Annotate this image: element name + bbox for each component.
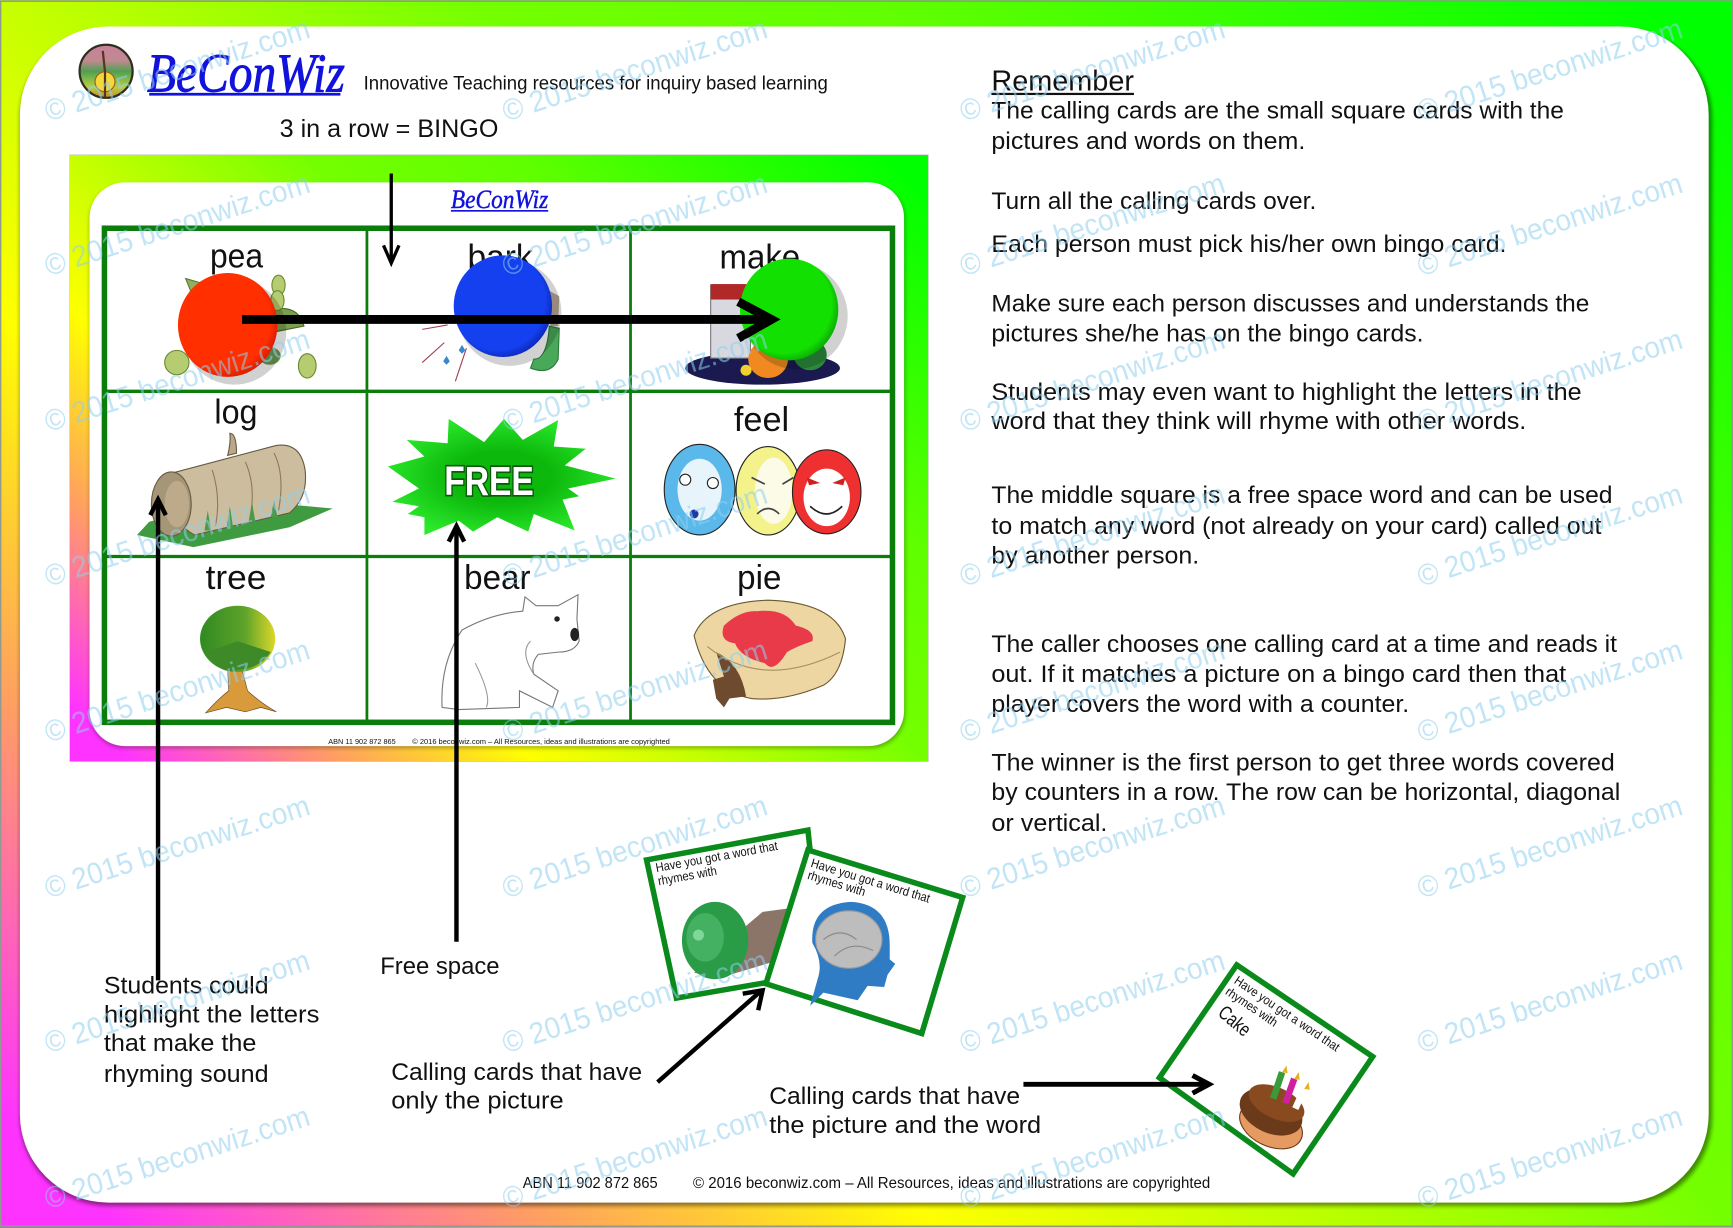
watermarks: © 2015 beconwiz.com	[41, 323, 314, 439]
watermarks: © 2015 beconwiz.com	[41, 12, 314, 128]
watermarks: © 2015 beconwiz.com	[41, 1100, 314, 1216]
heading: Remember: Remember	[991, 66, 1134, 98]
paragraph: winner: by counters in a row. The row can be horizontal, diagonal	[991, 779, 1620, 806]
paragraph: winner: The winner is the first person to get three words covered	[991, 749, 1615, 776]
tagline: Innovative Teaching resources for inquiry based learning	[364, 73, 828, 95]
arrow: to log letters	[150, 500, 166, 980]
calling card: brain	[766, 850, 963, 1033]
counter: blue	[454, 255, 561, 366]
paragraph: caller: The caller chooses one calling card at a time and reads it	[991, 631, 1617, 658]
watermarks: © 2015 beconwiz.com	[498, 1100, 771, 1216]
paragraph: free square: The middle square is a free space word and can be used	[991, 482, 1613, 509]
watermarks: © 2015 beconwiz.com	[498, 323, 771, 439]
watermarks: © 2015 beconwiz.com	[498, 789, 771, 905]
watermarks: © 2015 beconwiz.com	[1413, 1100, 1687, 1216]
paragraph: pick card: Each person must pick his/her own bingo card.	[991, 231, 1506, 258]
callout: highlight letters: rhyming sound	[104, 1061, 269, 1088]
watermarks: © 2015 beconwiz.com	[956, 944, 1229, 1060]
watermarks: © 2015 beconwiz.com	[41, 167, 314, 283]
watermarks: © 2015 beconwiz.com	[956, 1100, 1229, 1216]
footer: ABN 11 902 872 865	[523, 1175, 658, 1192]
watermarks: © 2015 beconwiz.com	[41, 634, 314, 749]
cell: bark	[422, 239, 559, 381]
watermarks: © 2015 beconwiz.com	[41, 944, 314, 1060]
watermarks: © 2015 beconwiz.com	[1413, 634, 1687, 749]
cell: FREE starburst: FREE	[444, 458, 534, 504]
calling card: cake: Cake	[1214, 1002, 1255, 1041]
calling card: snail: Have you got a word that	[654, 838, 779, 875]
paragraph: caller	[991, 631, 1617, 718]
watermarks: © 2015 beconwiz.com	[1413, 478, 1687, 594]
footer: © 2016 beconwiz.com – All Resources, ideas and illustrations are copyrighted	[693, 1175, 1210, 1192]
cell: log: log	[214, 393, 258, 431]
watermarks: © 2015 beconwiz.com	[498, 12, 771, 128]
icon: logo medallion	[80, 45, 133, 98]
paragraph: discuss: Make sure each person discusses and understands the	[991, 291, 1589, 318]
paragraph: free square: by another person.	[991, 543, 1199, 570]
paragraph: discuss: pictures she/he has on the bingo cards.	[991, 321, 1424, 348]
paragraph: winner	[991, 749, 1620, 837]
callout: highlight letters: Students could	[104, 973, 269, 1000]
calling card: cake: rhymes with	[1223, 984, 1281, 1030]
watermarks: © 2015 beconwiz.com	[956, 789, 1229, 905]
watermarks: © 2015 beconwiz.com	[956, 323, 1229, 439]
brand name: BeConWiz	[147, 43, 345, 104]
arrow: to cake card	[1023, 1075, 1209, 1093]
paragraph: highlight: word that they think will rhyme with other words.	[990, 408, 1526, 435]
watermarks: © 2015 beconwiz.com	[956, 12, 1229, 128]
heading: 3 in a row: 3 in a row = BINGO	[280, 115, 498, 143]
cell: make	[685, 239, 840, 385]
watermarks: © 2015 beconwiz.com	[1413, 944, 1687, 1060]
watermarks: © 2015 beconwiz.com	[1413, 323, 1687, 439]
cell: make: make	[720, 239, 800, 277]
paragraph: highlight: Students may even want to highlight the letters in the	[991, 379, 1582, 406]
cell: log	[137, 393, 333, 547]
callout: picture only cards	[391, 1059, 642, 1115]
calling card: snail	[647, 830, 823, 998]
watermarks: © 2015 beconwiz.com	[498, 634, 771, 749]
paragraph: caller: player covers the word with a counter.	[991, 691, 1409, 718]
cell: pea: pea	[210, 237, 264, 275]
watermarks: © 2015 beconwiz.com	[41, 478, 314, 594]
watermarks: © 2015 beconwiz.com	[498, 167, 771, 283]
paragraph: turn over: Turn all the calling cards over.	[991, 188, 1316, 215]
calling card: cake	[1159, 965, 1373, 1174]
callout: picture and word cards: the picture and the word	[769, 1112, 1041, 1139]
callout: picture and word cards: Calling cards that have	[769, 1083, 1020, 1110]
callout: highlight letters: that make the	[104, 1030, 256, 1057]
callout: highlight letters	[104, 973, 319, 1088]
watermarks: © 2015 beconwiz.com	[1413, 167, 1687, 283]
cell: bark: bark	[468, 239, 534, 277]
watermarks: © 2015 beconwiz.com	[956, 634, 1229, 749]
cell: feel: feel	[734, 401, 789, 439]
paragraph: highlight	[990, 379, 1582, 435]
arrow: row across	[242, 302, 771, 338]
watermarks: © 2015 beconwiz.com	[41, 789, 314, 905]
paragraph: caller: out. If it matches a picture on a bingo card then that	[991, 661, 1566, 688]
cell: feel	[664, 401, 861, 535]
calling card: brain: Have you got a word that	[809, 855, 932, 906]
arrow: column down	[384, 174, 399, 263]
arrow: to free space	[449, 526, 464, 942]
watermarks: © 2015 beconwiz.com	[1413, 789, 1687, 905]
cell: pie	[694, 559, 846, 707]
cell: bear: bear	[464, 559, 531, 597]
callout: picture only cards: only the picture	[391, 1088, 564, 1115]
cell: pie: pie	[737, 559, 781, 597]
paragraph: winner: or vertical.	[991, 810, 1107, 837]
calling card: snail: rhymes with	[657, 863, 718, 888]
small brand name: BeConWiz	[451, 184, 548, 214]
calling card: cake: Have you got a word that	[1232, 973, 1343, 1055]
paragraph: free square: to match any word (not already on your card) called out	[991, 513, 1602, 540]
callout: highlight letters: highlight the letters	[104, 1001, 319, 1028]
callout: picture only cards: Calling cards that have	[391, 1059, 642, 1086]
footer of bingo card: © 2016 beconwiz.com – All Resources, ideas and illustrations are copyrighted	[412, 738, 670, 746]
arrow: to picture cards	[658, 990, 763, 1082]
paragraph: calling cards: pictures and words on them.	[991, 128, 1305, 155]
panel: example bingo card	[70, 155, 928, 762]
paragraph: free square	[991, 482, 1613, 570]
counter: red	[178, 273, 286, 385]
bingo grid	[104, 228, 893, 723]
paragraph: discuss	[991, 291, 1589, 348]
watermarks: © 2015 beconwiz.com	[1413, 12, 1687, 128]
instructions text	[990, 97, 1620, 837]
header: logo and tagline	[80, 43, 828, 104]
cell: bear	[442, 559, 579, 710]
cell: tree	[200, 559, 276, 713]
paragraph: calling cards	[991, 97, 1564, 155]
cell: tree: tree	[206, 559, 266, 597]
watermarks: © 2015 beconwiz.com	[956, 167, 1229, 283]
watermarks: © 2015 beconwiz.com	[498, 478, 771, 594]
callout: picture and word cards	[769, 1083, 1041, 1139]
footer of bingo card: ABN 11 902 872 865	[328, 738, 396, 746]
counter: green	[740, 259, 848, 369]
callout: free space: Free space	[380, 953, 500, 980]
watermarks: © 2015 beconwiz.com	[498, 944, 771, 1060]
cell: pea	[165, 237, 316, 378]
cell: FREE starburst	[388, 419, 616, 535]
calling card: brain: rhymes with	[806, 867, 867, 899]
paragraph: calling cards: The calling cards are the small square cards with the	[991, 97, 1564, 124]
watermarks: © 2015 beconwiz.com	[956, 478, 1229, 594]
